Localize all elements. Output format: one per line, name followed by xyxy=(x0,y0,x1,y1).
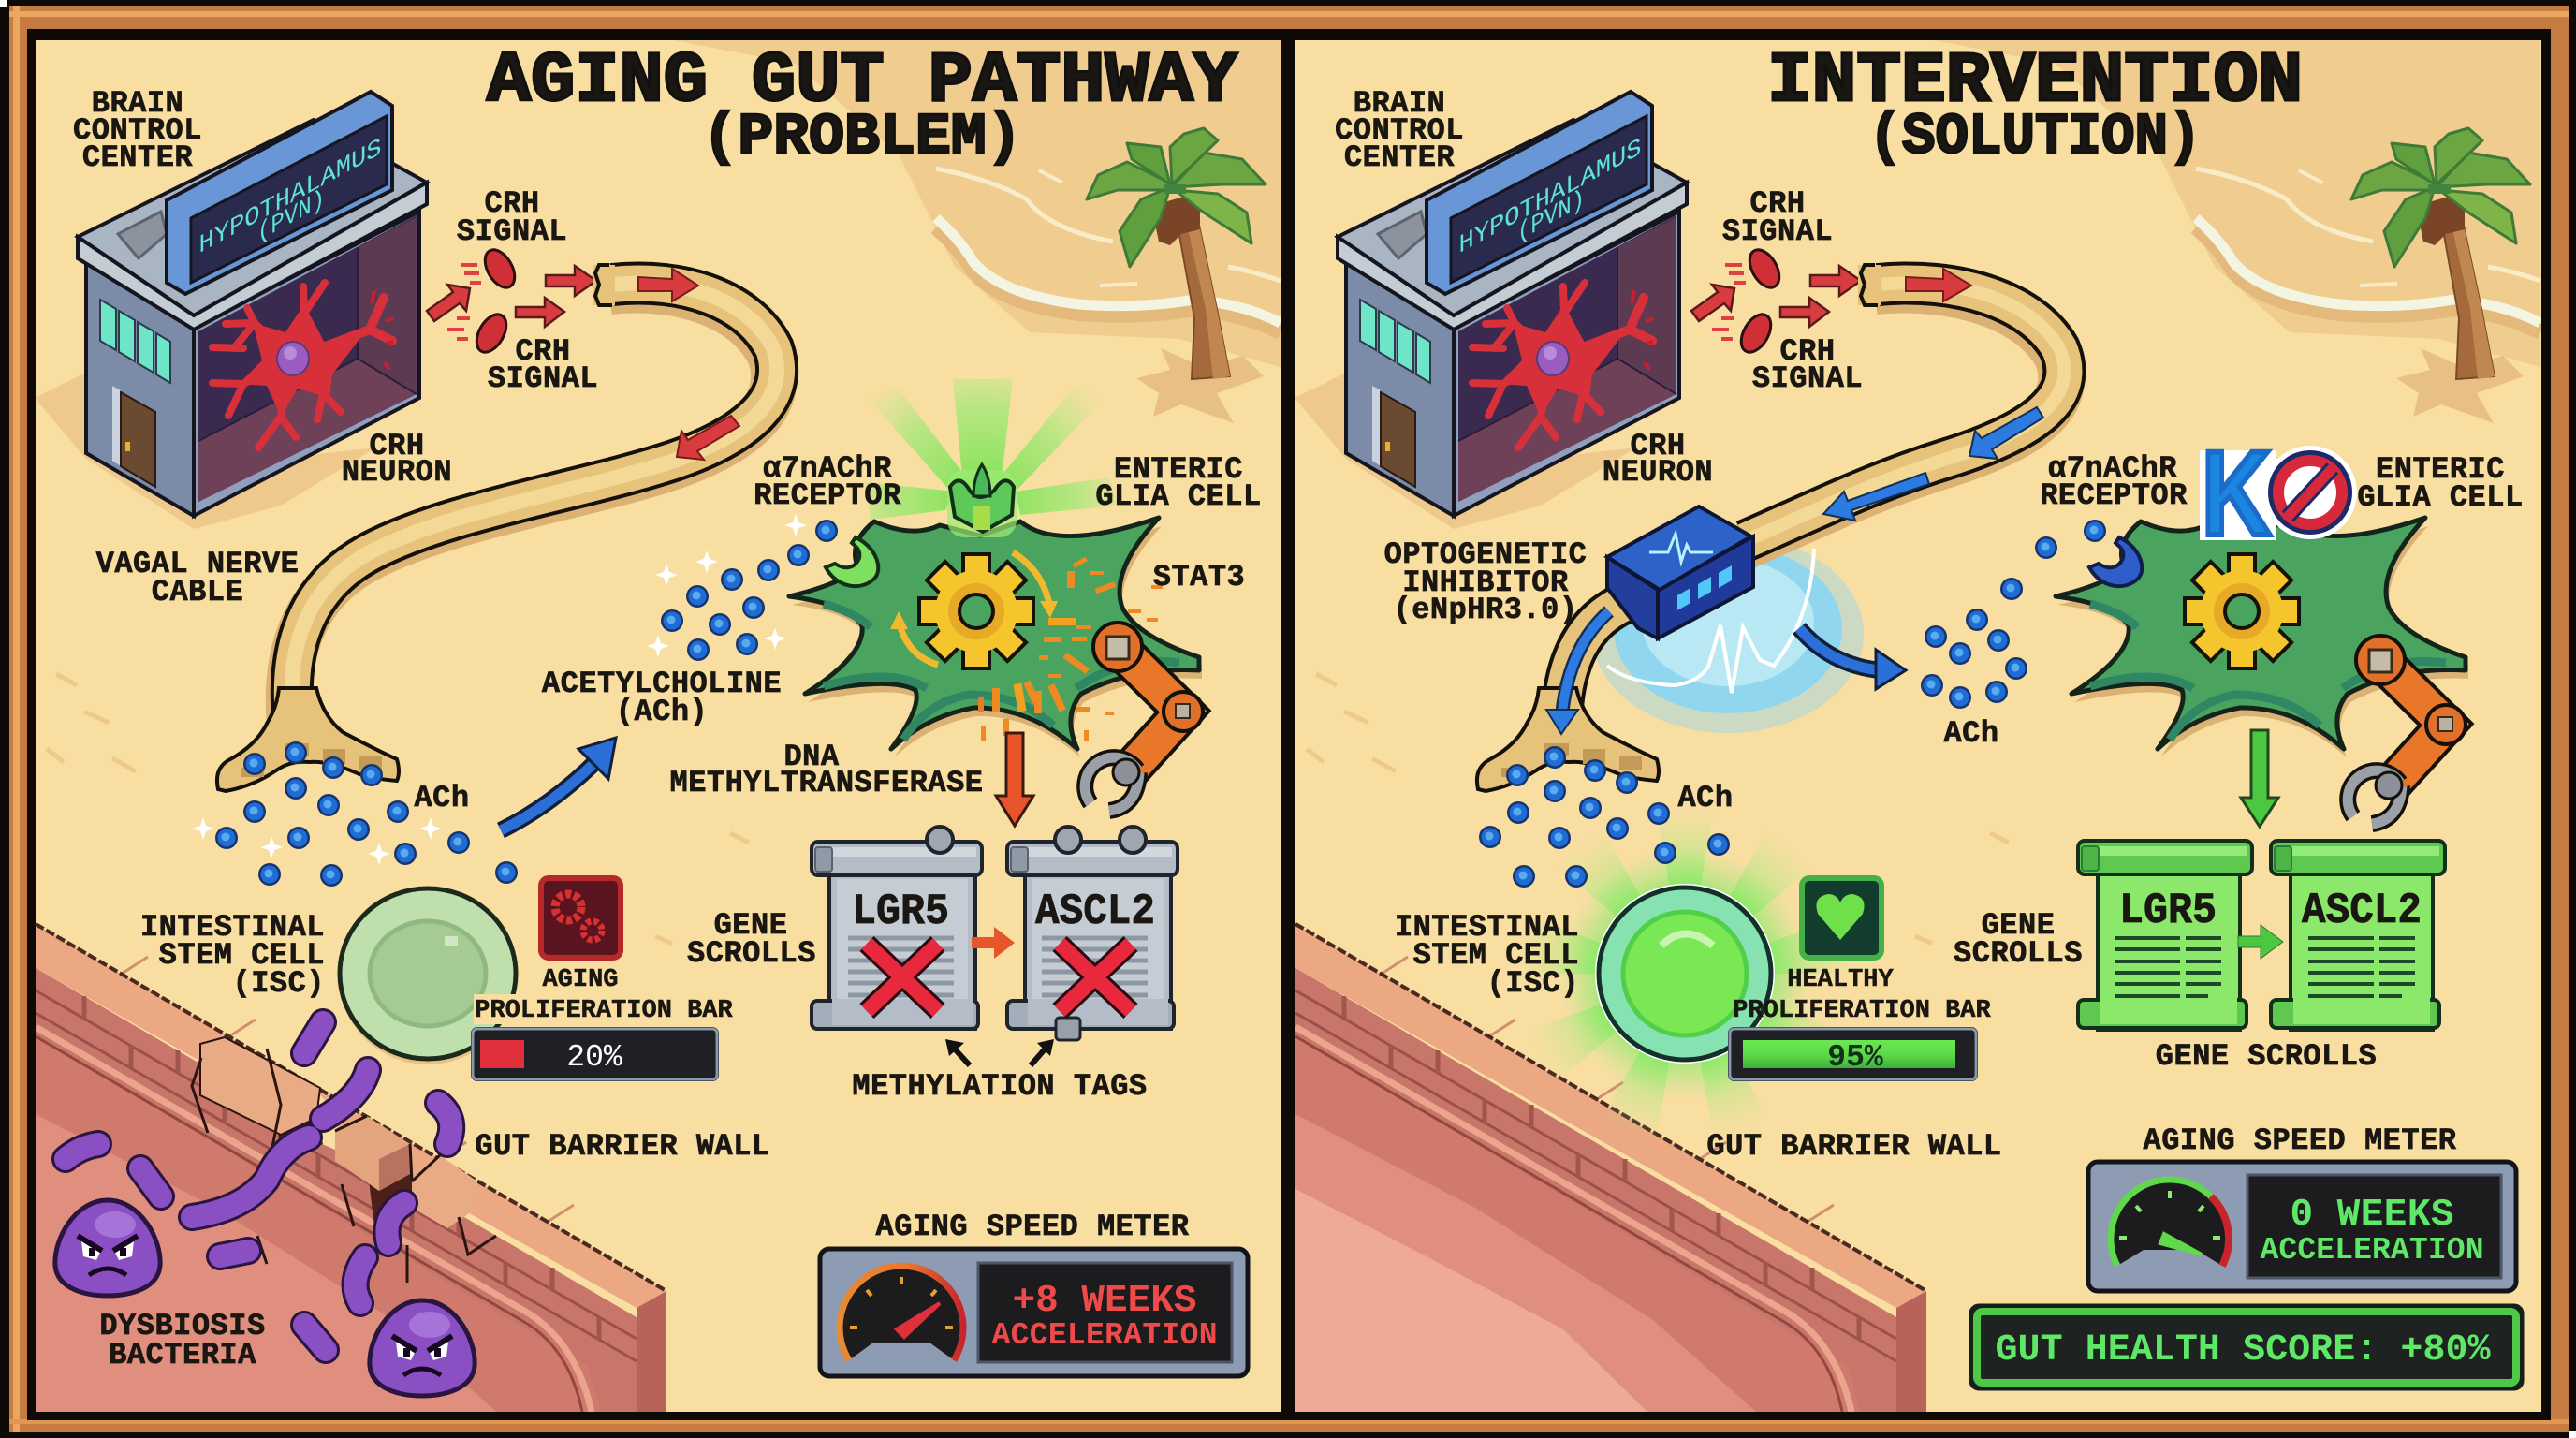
building: hypothalamus: HYPOTHALAMUS xyxy=(1458,132,1642,261)
robot arm xyxy=(2348,636,2466,824)
labels: RECEPTOR xyxy=(754,478,901,513)
proliferation bar: 20% xyxy=(473,1029,717,1079)
healthy glow rays xyxy=(1514,805,1856,1142)
vagal nerve cable xyxy=(217,265,777,791)
building: hypothalamus: (PVN) xyxy=(1517,183,1585,249)
labels: CRH xyxy=(1630,429,1686,463)
gene scrolls: active: ASCL2 xyxy=(2302,887,2422,935)
building: hypothalamus: (PVN) xyxy=(257,183,325,249)
arrow: between scrolls xyxy=(972,927,1015,959)
icon: gear xyxy=(2185,554,2299,668)
proliferation bar: 95% xyxy=(1730,1029,1976,1079)
robot arm xyxy=(1085,623,1203,811)
arrow: curved blue xyxy=(1799,628,1906,689)
receptor top: activated xyxy=(947,464,1017,537)
labels: VAGAL NERVE xyxy=(96,547,299,581)
labels: CRH xyxy=(1779,334,1836,369)
title xyxy=(487,41,1237,170)
rotation arrows xyxy=(890,552,1058,665)
icon: heart xyxy=(1802,878,1881,958)
gut health score: GUT HEALTH SCORE: +80% xyxy=(1996,1329,2491,1372)
labels: GUT BARRIER WALL xyxy=(1706,1129,2002,1164)
labels: PROLIFERATION BAR xyxy=(475,997,734,1025)
labels: (ISC) xyxy=(232,966,325,1001)
building: hypothalamus xyxy=(35,92,427,529)
receptor side: blocked xyxy=(2089,537,2142,586)
panel: intervention (solution) xyxy=(1295,40,2541,1412)
arrow: methyltransferase down xyxy=(996,733,1033,826)
icon: palm tree xyxy=(2351,128,2530,379)
enteric glia cell xyxy=(789,518,1202,757)
aging speed meter xyxy=(820,1249,1248,1376)
labels: SIGNAL xyxy=(1752,361,1863,396)
labels: ACh xyxy=(1943,716,1999,751)
labels: INTESTINAL xyxy=(140,910,325,945)
labels: SCROLLS xyxy=(1954,936,2083,971)
acetylcholine dots xyxy=(1921,520,2106,709)
bacterium: angry xyxy=(55,1200,160,1296)
labels: CRH xyxy=(484,186,540,221)
arrow: blue up xyxy=(501,738,616,830)
labels: ACh xyxy=(1677,781,1734,815)
labels: STEM CELL xyxy=(1413,938,1579,973)
dysbiosis bacteria rods xyxy=(66,1022,451,1350)
bacterium: angry xyxy=(370,1300,475,1396)
labels: SIGNAL xyxy=(1722,214,1833,249)
intestinal stem cell: healthy xyxy=(1595,884,1775,1064)
labels: GENE xyxy=(1982,908,2055,943)
gene scrolls: silenced: LGR5 xyxy=(852,888,949,936)
CRH signal pills and arrows xyxy=(427,244,596,358)
labels: ENTERIC xyxy=(1114,452,1243,487)
labels: AGING xyxy=(542,966,619,994)
gene scrolls: active xyxy=(2078,841,2445,1030)
knockout badge: K xyxy=(2202,427,2271,561)
acetylcholine dots from nerve foot xyxy=(192,741,518,887)
title: (SOLUTION) xyxy=(1868,104,2202,170)
labels: AGING SPEED METER xyxy=(2144,1123,2457,1158)
labels: SIGNAL xyxy=(488,361,598,396)
labels: STAT3 xyxy=(1153,560,1245,594)
labels: BRAIN xyxy=(1354,86,1445,121)
labels: GLIA CELL xyxy=(1095,479,1262,514)
acetylcholine dots near glia xyxy=(647,514,838,661)
title: INTERVENTION xyxy=(1767,41,2303,122)
labels: BRAIN xyxy=(92,86,183,121)
labels: STEM CELL xyxy=(159,938,325,973)
labels: HEALTHY xyxy=(1787,966,1895,994)
labels: α7nAChR xyxy=(763,451,892,486)
labels: GENE xyxy=(714,908,787,943)
intestinal stem cell xyxy=(340,888,530,1064)
labels: GUT BARRIER WALL xyxy=(475,1129,770,1164)
labels: GENE SCROLLS xyxy=(2156,1039,2377,1074)
glow rays from receptor xyxy=(866,379,1119,520)
title: (PROBLEM) xyxy=(702,104,1022,170)
aging speed meter: ACCELERATION xyxy=(992,1318,1217,1353)
building: hypothalamus: HYPOTHALAMUS xyxy=(198,132,382,261)
CRH signal pills and arrows xyxy=(1691,244,1861,358)
labels: (ISC) xyxy=(1486,966,1579,1001)
arrow: between scrolls xyxy=(2238,925,2283,959)
labels: CRH xyxy=(1749,186,1806,221)
title xyxy=(1767,41,2303,170)
labels: SIGNAL xyxy=(457,214,567,249)
optogenetic device xyxy=(1607,506,1753,638)
acetylcholine dots from nerve foot xyxy=(1479,746,1730,888)
proliferation bar: 20%: 20% xyxy=(566,1040,622,1075)
labels: CENTER xyxy=(1344,140,1455,175)
icon: gear xyxy=(919,554,1033,668)
labels: GLIA CELL xyxy=(2357,480,2524,515)
title: AGING GUT PATHWAY xyxy=(487,41,1237,122)
arrows: methylation tags xyxy=(945,1039,1054,1065)
gut barrier wall (intact) xyxy=(1295,924,1926,1412)
aging speed meter: 0 WEEKS xyxy=(2290,1194,2454,1237)
labels: NEURON xyxy=(1603,455,1713,490)
labels: CONTROL xyxy=(1335,113,1464,148)
labels: INHIBITOR xyxy=(1402,565,1569,600)
labels: NEURON xyxy=(342,455,452,490)
gut barrier wall (cracked) xyxy=(36,924,666,1412)
building: hypothalamus xyxy=(1295,92,1687,529)
labels: RECEPTOR xyxy=(2040,478,2188,513)
labels: CENTER xyxy=(82,140,193,175)
labels: CABLE xyxy=(152,575,243,609)
STAT3 sparks xyxy=(978,556,1163,741)
aging speed meter xyxy=(2088,1162,2516,1291)
proliferation bar: 95%: 95% xyxy=(1827,1040,1883,1075)
labels: PROLIFERATION BAR xyxy=(1733,997,1992,1025)
labels: BACTERIA xyxy=(109,1338,256,1372)
labels: CRH xyxy=(369,429,425,463)
labels: CRH xyxy=(515,334,571,369)
icon: aging gears xyxy=(541,878,621,958)
gene scrolls: silenced: ASCL2 xyxy=(1035,888,1155,936)
enteric glia cell xyxy=(2056,518,2468,757)
knockout badge xyxy=(2200,427,2357,561)
vagal nerve cable (lower) xyxy=(1477,599,1659,791)
aging speed meter: +8 WEEKS xyxy=(1013,1280,1196,1323)
labels: ACETYLCHOLINE xyxy=(542,667,782,701)
labels: INTESTINAL xyxy=(1395,910,1579,945)
labels: CONTROL xyxy=(73,113,202,148)
light pulse glow xyxy=(1592,535,1864,733)
labels: (eNpHR3.0) xyxy=(1393,593,1578,627)
labels: SCROLLS xyxy=(687,936,816,971)
labels: METHYLATION TAGS xyxy=(852,1069,1148,1104)
labels: METHYLTRANSFERASE xyxy=(670,766,983,800)
labels: ENTERIC xyxy=(2376,452,2505,487)
panel: aging gut pathway (problem) xyxy=(35,40,1281,1412)
labels: α7nAChR xyxy=(2048,451,2177,486)
labels xyxy=(73,86,1262,1372)
gut health score xyxy=(1971,1306,2522,1388)
vagal nerve cable (upper) xyxy=(1742,265,2064,548)
labels: AGING SPEED METER xyxy=(876,1210,1190,1244)
labels: OPTOGENETIC xyxy=(1384,537,1587,572)
labels: (ACh) xyxy=(616,695,708,729)
labels: ACh xyxy=(414,781,470,815)
labels xyxy=(1335,86,2524,1164)
labels: DYSBIOSIS xyxy=(99,1309,266,1343)
gene scrolls: silenced xyxy=(812,827,1178,1040)
gene scrolls: active: LGR5 xyxy=(2119,887,2217,935)
arrow: activation down xyxy=(2241,730,2278,827)
receptor side: crescent xyxy=(826,537,878,586)
labels: DNA xyxy=(783,740,840,774)
aging speed meter: ACCELERATION xyxy=(2260,1233,2484,1268)
icon: palm tree xyxy=(1087,128,1266,379)
